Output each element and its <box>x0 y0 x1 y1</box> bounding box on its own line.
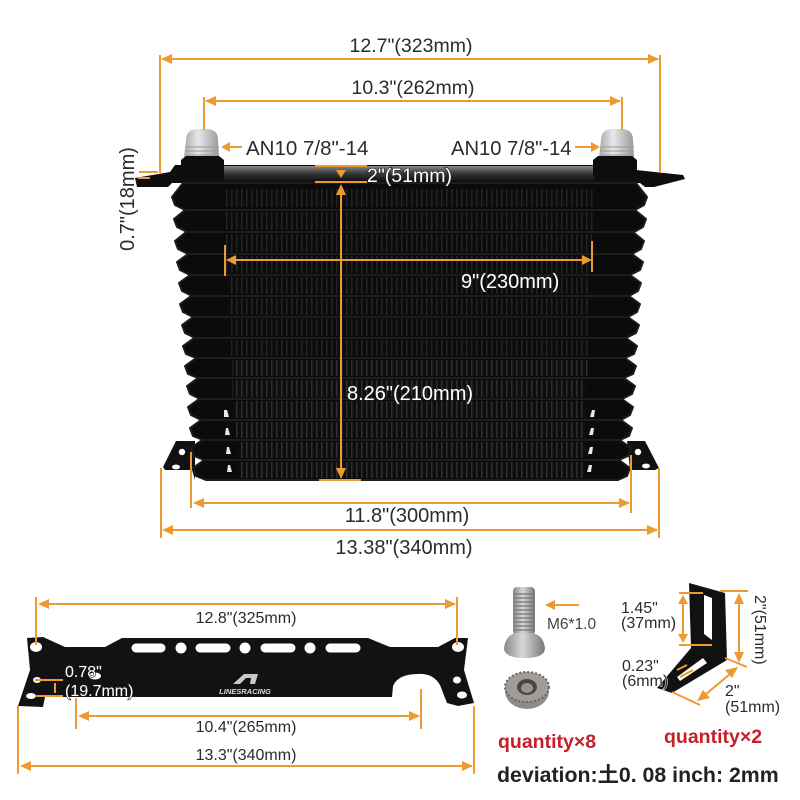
dimension: slot spacing on plate <box>35 664 133 700</box>
label: bolt thread: M6*1.0 <box>547 616 596 633</box>
dimension: core width <box>225 241 592 293</box>
bolt <box>504 587 545 658</box>
dimension: plate centre width: 10.4"(265mm) <box>196 719 296 736</box>
dimension: bracket slot width: (6mm) <box>622 673 668 690</box>
cooler rows <box>172 183 647 480</box>
dimension: bracket foot length: 2" <box>725 683 740 700</box>
dimension: core height: 8.26"(210mm) <box>347 383 473 405</box>
brand logo <box>219 674 271 696</box>
side highlights <box>224 410 595 472</box>
label: left fitting thread: AN10 7/8"-14 <box>246 137 368 160</box>
dimension: plate centre width <box>76 689 421 736</box>
top mounting bar <box>135 165 685 187</box>
dimension: body width: 11.8"(300mm) <box>345 505 469 527</box>
dimension: body width <box>191 452 631 527</box>
label: right fitting thread: AN10 7/8"-14 <box>451 138 572 160</box>
dimension: plate hole spacing <box>36 597 457 645</box>
quantity: brackets: quantity×2 <box>664 726 762 748</box>
dimension: bracket slot width <box>622 658 693 690</box>
brand logo: LINESRACING <box>219 687 271 696</box>
top plate highlight <box>224 166 594 182</box>
dimension: bracket slot length: (37mm) <box>621 615 676 632</box>
bottom mounting brackets <box>163 441 659 480</box>
dimension: overall bottom width: 13.38"(340mm) <box>335 537 473 559</box>
plate holes <box>26 642 467 699</box>
dimension: bracket hole spacing <box>117 147 158 251</box>
dimension: core width: 9"(230mm) <box>461 271 559 293</box>
oil cooler <box>135 129 685 480</box>
right fitting <box>593 129 637 179</box>
cooling fins <box>224 189 596 478</box>
left fitting <box>181 129 224 179</box>
dimension: plate hole spacing: 12.8"(325mm) <box>196 610 296 627</box>
dimension: bracket slot width: 0.23" <box>622 658 659 675</box>
L bracket <box>657 583 727 693</box>
dimension: bracket hole spacing: 0.7"(18mm) <box>117 147 139 251</box>
dimension: core height <box>319 184 473 480</box>
dimension: bracket slot length <box>621 593 712 645</box>
dimension: fitting spacing <box>204 77 622 130</box>
dimension: bracket foot length <box>672 667 780 716</box>
quantity: bolts and nuts: quantity×8 <box>498 731 596 753</box>
dimension: overall top width <box>160 35 660 173</box>
dimension: bracket foot length: (51mm) <box>725 699 780 716</box>
dimension: fitting spacing: 10.3"(262mm) <box>352 77 474 99</box>
dimension: plate overall width <box>18 706 474 774</box>
dimension: bracket slot length: 1.45" <box>621 600 658 617</box>
dimension: plate overall width: 13.3"(340mm) <box>196 747 296 764</box>
dimension: plate height: 2"(51mm) <box>367 165 452 187</box>
flange nut <box>505 672 549 709</box>
dimension: bracket height <box>720 591 768 667</box>
label: bolt thread <box>545 600 596 633</box>
mounting plate <box>18 637 474 707</box>
deviation note: deviation:土0. 08 inch: 2mm <box>497 763 779 787</box>
dimension: overall bottom width <box>161 468 659 559</box>
dimension: slot spacing on plate: (19.7mm) <box>65 683 133 700</box>
dimension: plate height <box>315 165 452 187</box>
dimension: slot spacing on plate: 0.78" <box>65 664 102 681</box>
dimension: bracket height: 2"(51mm) <box>751 595 768 665</box>
dimension: overall top width: 12.7"(323mm) <box>350 35 472 57</box>
